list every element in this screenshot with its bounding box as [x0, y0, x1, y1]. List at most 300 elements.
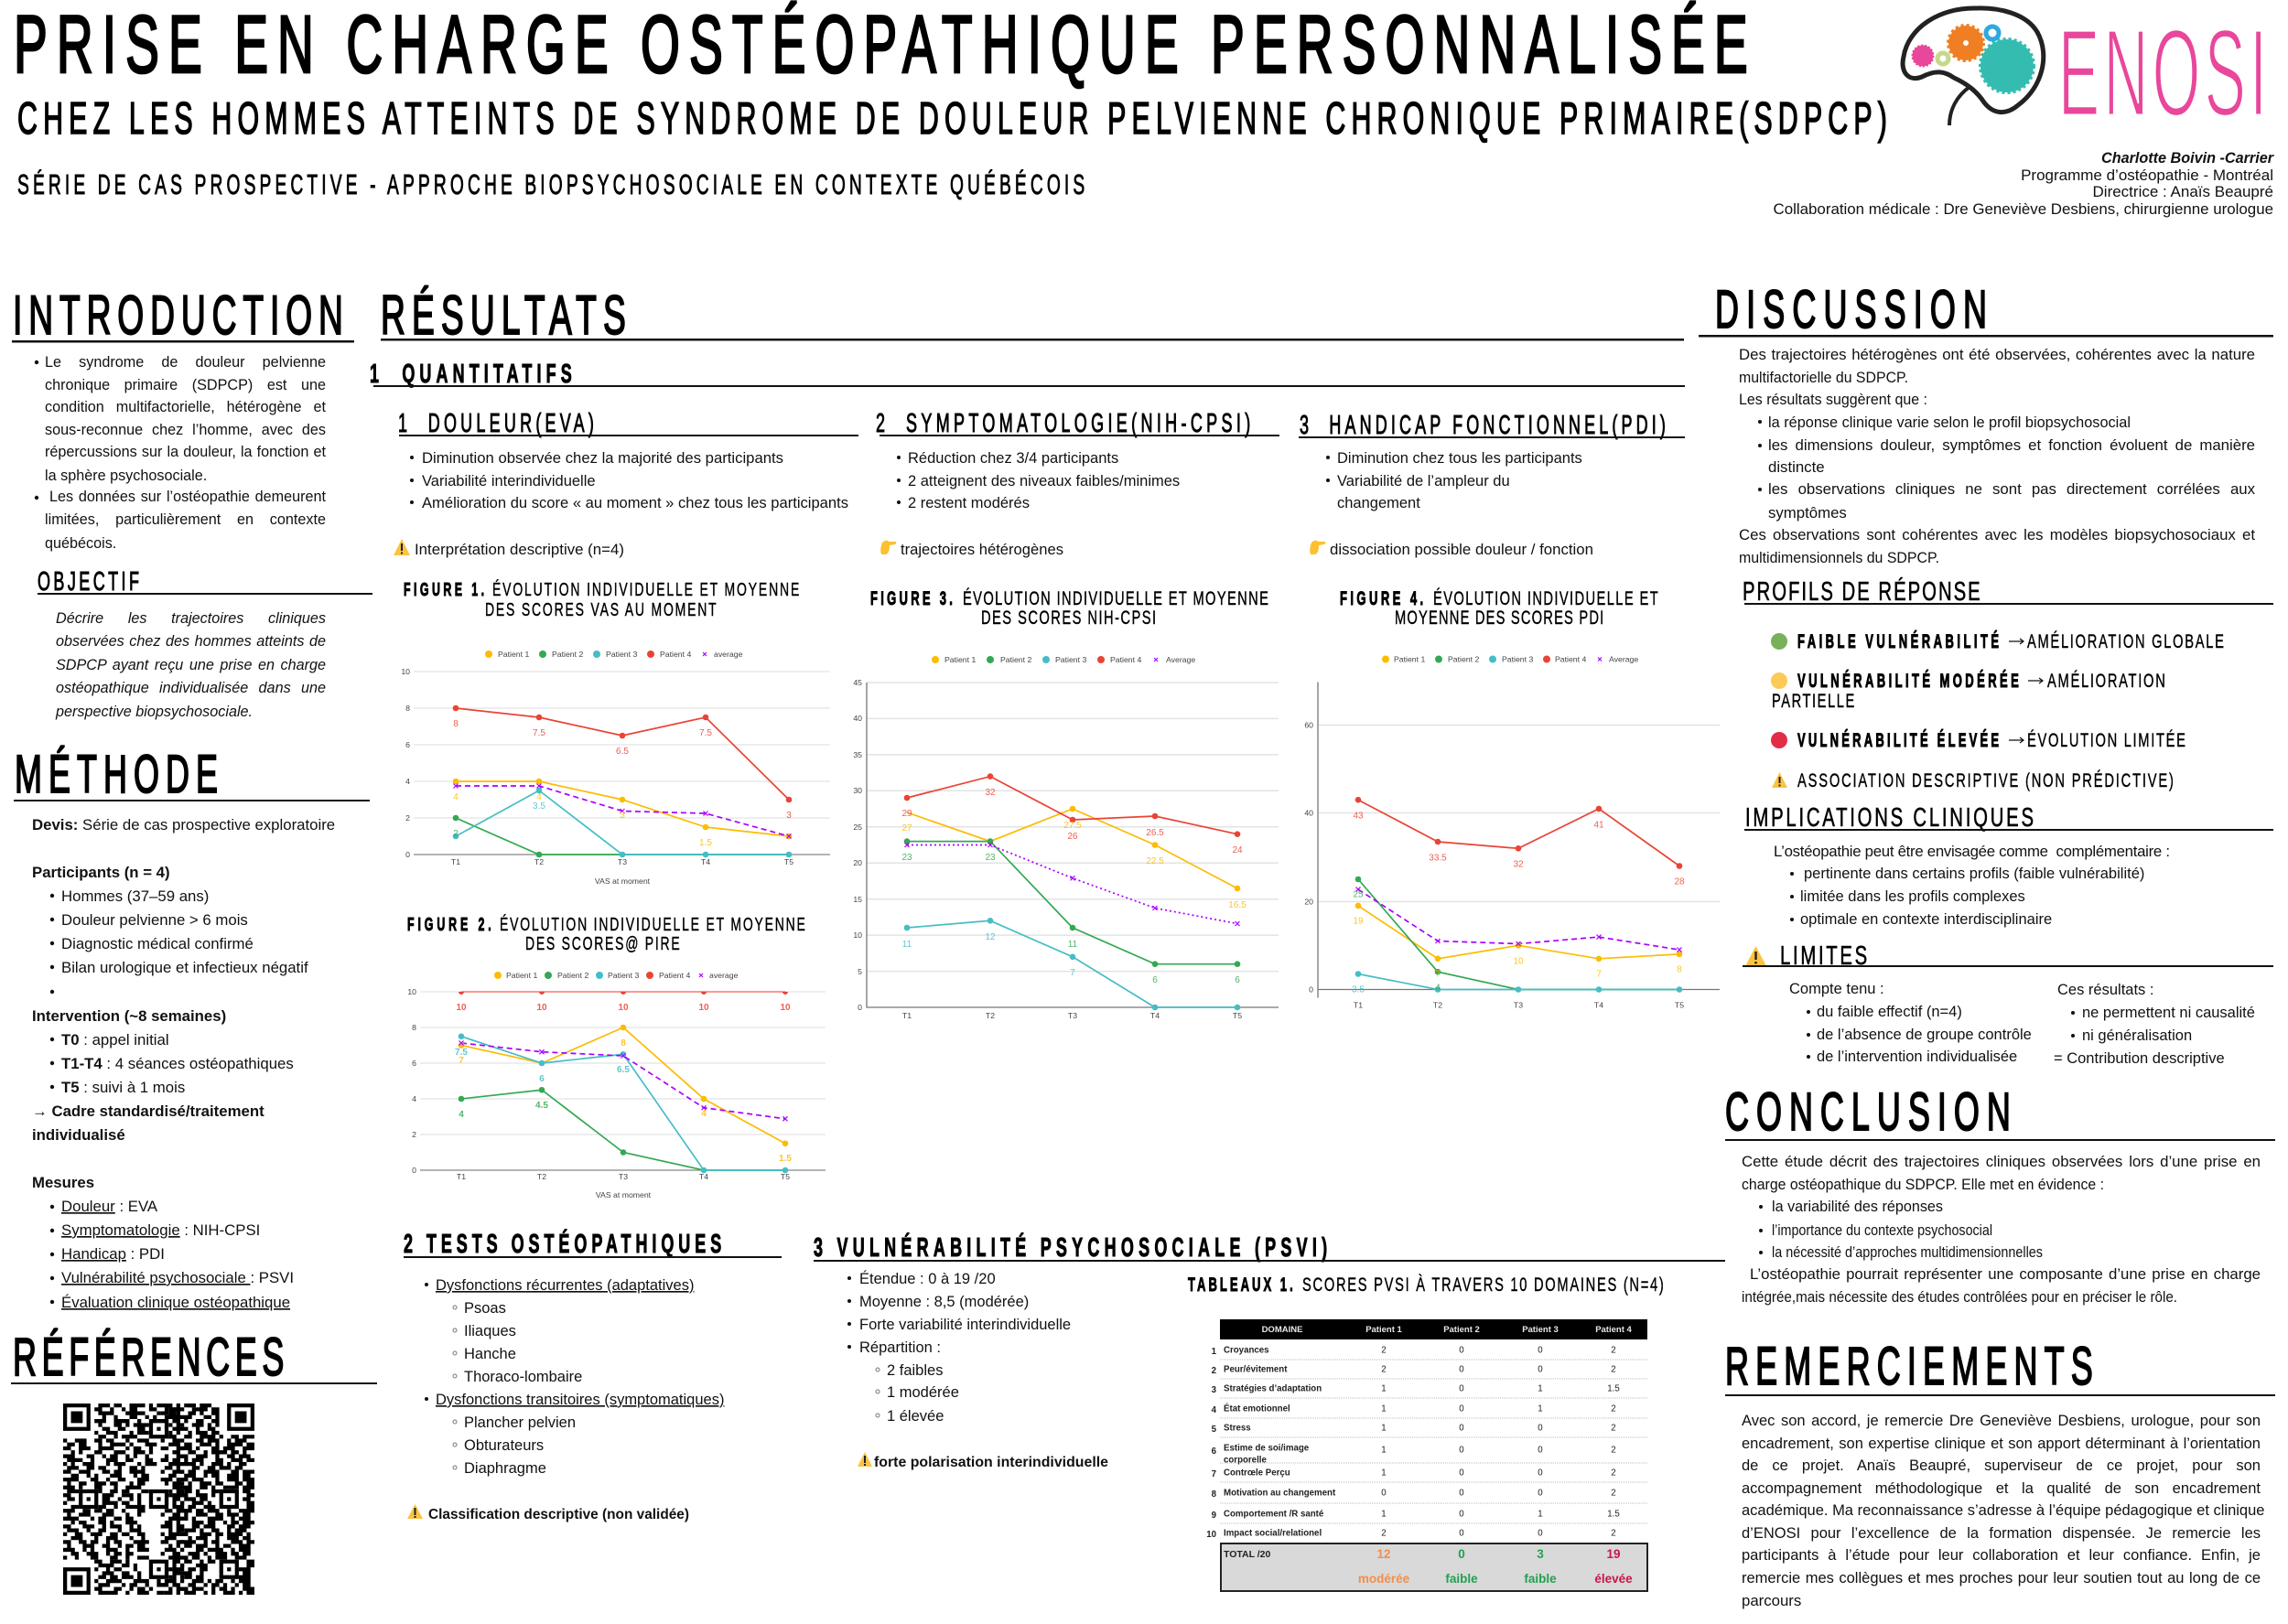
chart: figure 3: 32: [985, 788, 996, 798]
panel: méthode: T5 : suivi à 1 mois: [61, 1079, 185, 1096]
table rows: 0: [1538, 1528, 1543, 1539]
panel: limites: [1743, 941, 2273, 1067]
chart: figure 3: [853, 655, 1279, 1020]
chart: figure 1: T4: [701, 857, 710, 866]
table rows: 4: [1212, 1405, 1217, 1415]
chart: figure 4: 25: [1353, 889, 1364, 900]
panel: méthode: Participants (n = 4): [32, 864, 170, 881]
panel: discussion: Les résultats suggèrent que :: [1739, 391, 1927, 408]
chart: figure 3: T5: [1233, 1011, 1242, 1020]
table rows: 0: [1459, 1404, 1464, 1414]
chart: figure 2: T2: [537, 1172, 546, 1181]
table total row: 19: [1606, 1547, 1621, 1561]
panel: profils de réponse: [1743, 575, 2273, 791]
table: scores PVSI: [1188, 1274, 1664, 1591]
table rows: 0: [1538, 1446, 1543, 1455]
panel: remerciements: remercie mes collègues et mes proches pour leur soutien tout au long de ce: [1742, 1570, 2261, 1586]
chart: figure 2: 10: [698, 1003, 709, 1013]
table rows: 3: [1212, 1385, 1217, 1395]
table header: Patient 2: [1443, 1325, 1480, 1335]
panel: implications cliniques: [1744, 803, 2273, 928]
profile: élevée: ÉVOLUTION LIMITÉE: [2027, 729, 2185, 751]
profile: modérée: [1771, 669, 2165, 712]
chart: figure 1: Patient 1: [498, 650, 529, 659]
chart: figure 4: 3.5: [1352, 984, 1365, 995]
figure 1: [401, 578, 830, 886]
chart: figure 4: 20: [1304, 897, 1313, 906]
figure 3 title: DES SCORES NIH-CPSI: [981, 607, 1156, 629]
panel: discussion: multidimensionnels du SDPCP.: [1739, 549, 1939, 566]
table header: [1220, 1319, 1647, 1339]
table total row: faible: [1524, 1572, 1557, 1586]
panel: vulnérabilité psychosociale: Moyenne : 8,5 (modérée): [859, 1294, 1029, 1310]
heading: références: RÉFÉRENCES: [13, 1328, 284, 1387]
panel: vulnérabilité psychosociale: 1 élevée: [887, 1408, 944, 1425]
profile: modérée: PARTIELLE: [1772, 690, 1854, 712]
table header: Patient 4: [1595, 1325, 1633, 1335]
figure 3: [853, 587, 1279, 1020]
chart: figure 1: average: [714, 650, 743, 659]
chart: figure 4: 10: [1513, 957, 1524, 966]
panel: limites: ne permettent ni causalité: [2082, 1005, 2255, 1021]
table rows: 0: [1459, 1383, 1464, 1394]
chart: figure 3: 20: [853, 858, 862, 867]
figure 1 title: FIGURE 1.: [404, 579, 484, 600]
table rows: 1.5: [1607, 1510, 1620, 1519]
panel: douleur: Diminution observée chez la majorité des participants: [422, 450, 783, 467]
chart: figure 3: 25: [853, 823, 862, 832]
table rows: 2: [1381, 1365, 1387, 1374]
subtitle: CHEZ LES HOMMES ATTEINTS DE SYNDROME DE DOULEUR PELVIENNE CHRONIQUE PRIMAIRE(SDPCP): [17, 93, 1887, 144]
chart: figure 2: 4: [412, 1094, 416, 1103]
chart: figure 1: 0: [405, 850, 410, 859]
chart: figure 3: 11: [902, 940, 912, 950]
chart: figure 4: Patient 3: [1502, 655, 1533, 664]
profile: élevée: VULNÉRABILITÉ ÉLEVÉE: [1797, 728, 1999, 751]
panel: douleur: Amélioration du score « au moment » chez tous les participants: [422, 495, 848, 511]
chart: figure 1: 6.5: [616, 747, 629, 757]
panel: conclusion: la variabilité des réponses: [1772, 1198, 1943, 1215]
table rows: 0: [1459, 1446, 1464, 1455]
table rows: 1: [1381, 1510, 1387, 1519]
heading: symptomatologie: 2 SYMPTOMATOLOGIE(NIH-CPSI): [876, 409, 1250, 438]
panel: introduction: limitées, particulièrement en contexte: [45, 511, 326, 528]
heading: conclusion: CONCLUSION: [1725, 1082, 2011, 1142]
figure 2: [407, 913, 826, 1199]
table rows: 2: [1611, 1365, 1616, 1374]
table rows: 6: [1212, 1447, 1217, 1457]
table rows: 2: [1611, 1404, 1616, 1414]
panel: méthode: [14, 745, 370, 1311]
chart: figure 3: 30: [853, 786, 862, 795]
icon: warning: [407, 1504, 423, 1519]
chart: figure 4: 7: [1435, 970, 1441, 979]
heading: handicap: 3 HANDICAP FONCTIONNEL(PDI): [1300, 411, 1666, 440]
panel: méthode: → Cadre standardisé/traitement: [32, 1102, 264, 1120]
chart: figure 3: 0: [858, 1003, 862, 1012]
chart: figure 4: 4: [1435, 983, 1441, 994]
figure 4 title: ÉVOLUTION INDIVIDUELLE ET: [1433, 587, 1658, 609]
panel: limites: ni généralisation: [2082, 1027, 2192, 1044]
panel: symptomatologie: 2 restent modérés: [908, 495, 1030, 511]
heading: vulnérabilité: 3 VULNÉRABILITÉ PSYCHOSOCIALE (PSVI): [814, 1232, 1327, 1263]
authors: Programme d’ostéopathie - Montréal: [2021, 167, 2273, 184]
panel: handicap fonctionnel: dissociation possible douleur / fonction: [1330, 542, 1593, 558]
table rows: 0: [1459, 1365, 1464, 1374]
chart: figure 3: T4: [1150, 1011, 1160, 1020]
panel: remerciements: Avec son accord, je remercie Dre Geneviève Desbiens, urologue, pour son: [1742, 1413, 2261, 1429]
table rows: 1: [1381, 1424, 1387, 1433]
heading: méthode: MÉTHODE: [15, 745, 218, 804]
table header: Patient 1: [1365, 1325, 1403, 1335]
chart: figure 2: Patient 1: [506, 971, 537, 980]
figure 2 title: ÉVOLUTION INDIVIDUELLE ET MOYENNE: [500, 913, 805, 935]
association note: ASSOCIATION DESCRIPTIVE (NON PRÉDICTIVE): [1797, 769, 2174, 791]
table rows: 2: [1611, 1446, 1616, 1455]
chart: figure 1: 4: [453, 792, 459, 802]
chart: figure 4: 28: [1674, 877, 1685, 887]
table rows: 0: [1459, 1510, 1464, 1519]
heading: introduction: INTRODUCTION: [13, 285, 343, 346]
chart: figure 3: 24: [1232, 845, 1243, 855]
panel: remerciements: [1725, 1337, 2275, 1609]
table rows: Contrœle Perçu: [1224, 1468, 1290, 1479]
chart: figure 1: [401, 650, 830, 886]
table rows: 1.5: [1607, 1383, 1620, 1394]
chart: figure 2: 8: [412, 1023, 416, 1032]
chart: figure 1: 1.5: [699, 838, 712, 848]
chart: figure 4: 60: [1304, 721, 1313, 730]
chart: figure 4: T2: [1433, 1001, 1442, 1010]
chart: figure 3: 26.5: [1146, 828, 1164, 838]
chart: figure 4: 19: [1353, 917, 1364, 926]
table rows: corporelle: [1224, 1455, 1267, 1466]
panel: discussion: Des trajectoires hétérogènes ont été observées, cohérentes avec la nature: [1739, 346, 2255, 363]
chart: figure 4: 40: [1304, 809, 1313, 818]
panel: vulnérabilité psychosociale: Répartition :: [859, 1339, 941, 1356]
chart: figure 2: 10: [618, 1003, 629, 1013]
authors: [1774, 150, 2275, 218]
table rows: 9: [1212, 1511, 1217, 1521]
chart: figure 2: 4.5: [535, 1101, 548, 1111]
chart: figure 2: 7: [459, 1056, 464, 1066]
panel: remerciements: accompagnement méthodologique et la qualité de son encadrement: [1742, 1480, 2261, 1497]
chart: figure 2: T3: [619, 1172, 628, 1181]
chart: figure 1: Patient 2: [552, 650, 583, 659]
panel: méthode: Douleur : EVA: [61, 1198, 158, 1215]
panel: tests ostéopathiques: Dysfonctions récurrentes (adaptatives): [436, 1277, 694, 1294]
chart: figure 3: 7: [1070, 968, 1075, 978]
panel: objectif: ostéopathique individualisée dans une: [56, 680, 326, 696]
chart: figure 1: 6: [405, 740, 410, 749]
chart: figure 1: 3.5: [533, 801, 545, 812]
chart: figure 1: Patient 3: [606, 650, 637, 659]
panel: discussion: distincte: [1768, 458, 1825, 476]
panel: objectif: SDPCP ayant reçu une prise en charge: [56, 657, 326, 673]
panel: conclusion: l’importance du contexte psychosocial: [1772, 1221, 1992, 1239]
figure 4 title: [1340, 587, 1658, 629]
table rows: 0: [1538, 1345, 1543, 1356]
figure 1 title: DES SCORES VAS AU MOMENT: [485, 598, 717, 620]
panel: tests ostéopathiques: Classification descriptive (non validée): [428, 1507, 689, 1522]
panel: vulnérabilité psychosociale: Forte variabilité interindividuelle: [859, 1317, 1071, 1333]
chart: figure 3: 26: [1067, 832, 1078, 842]
panel: méthode: Handicap : PDI: [61, 1245, 165, 1263]
table rows: [1206, 1345, 1620, 1540]
figure 3 title: FIGURE 3.: [870, 587, 953, 609]
table rows: Peur/évitement: [1224, 1365, 1288, 1374]
panel: objectif: [38, 567, 372, 720]
chart: figure 4: T1: [1354, 1001, 1363, 1010]
panel: remerciements: d’ENOSI pour l’excellence de la formation dispensée. Je remercie les: [1742, 1524, 2261, 1541]
panel: remerciements: parcours: [1742, 1592, 1801, 1609]
chart: figure 2: 1.5: [779, 1154, 792, 1164]
authors: Charlotte Boivin -Carrier: [2101, 150, 2275, 167]
table title: SCORES PVSI À TRAVERS 10 DOMAINES (N=4): [1302, 1274, 1664, 1296]
chart: figure 3: 40: [853, 714, 862, 723]
figure 2 title: [407, 913, 805, 954]
chart: figure 2: [407, 971, 826, 1199]
panel: conclusion: charge ostéopathique du SDPCP. Elle met en évidence :: [1742, 1176, 2104, 1193]
panel: tests ostéopathiques: Thoraco-lombaire: [464, 1369, 582, 1385]
heading: discussion: DISCUSSION: [1715, 280, 1987, 339]
heading: tests: 2 TESTS OSTÉOPATHIQUES: [404, 1229, 721, 1259]
heading: résultats: RÉSULTATS: [381, 285, 626, 346]
chart: figure 1: 2: [453, 829, 459, 839]
chart: figure 3: Average: [1166, 655, 1195, 664]
panel: conclusion: la nécessité d’approches multidimensionnelles: [1772, 1243, 2043, 1261]
panel: tests ostéopathiques: Psoas: [464, 1300, 506, 1317]
chart: figure 2: 4: [459, 1110, 464, 1120]
panel: implications cliniques: pertinente dans certains profils (faible vulnérabilité): [1804, 866, 2144, 882]
QR code: [63, 1404, 254, 1595]
table total row: [1221, 1543, 1647, 1591]
heading: douleur: 1 DOULEUR(EVA): [398, 409, 594, 438]
chart: figure 1: 8: [405, 704, 410, 713]
chart: figure 2: average: [709, 971, 739, 980]
table rows: 1: [1381, 1383, 1387, 1394]
chart: figure 3: 45: [853, 678, 862, 687]
panel: implications cliniques: L’ostéopathie peut être envisagée comme complémentaire :: [1774, 843, 2170, 860]
table rows: 0: [1459, 1468, 1464, 1479]
icon: warning: [394, 539, 410, 555]
panel: limites: Compte tenu :: [1789, 981, 1884, 997]
chart: figure 3: T1: [902, 1011, 912, 1020]
chart: figure 1: 3: [620, 811, 625, 821]
table total row: modérée: [1358, 1572, 1410, 1586]
table total row: 12: [1376, 1547, 1391, 1561]
profile: élevée: [1771, 728, 2185, 751]
chart: figure 1: Patient 4: [660, 650, 691, 659]
chart: figure 4: Patient 1: [1394, 655, 1425, 664]
table rows: Croyances: [1224, 1345, 1269, 1356]
panel: vulnérabilité psychosociale: 2 faibles: [887, 1362, 943, 1379]
panel: introduction: sous-reconnue chez l’homme, avec des: [45, 422, 326, 438]
chart: figure 4: Average: [1609, 655, 1638, 664]
table rows: Stress: [1224, 1424, 1251, 1433]
chart: figure 3: 35: [853, 750, 862, 759]
chart: figure 3: 12: [985, 932, 996, 942]
chart: figure 4: 41: [1593, 820, 1604, 831]
panel: conclusion: Cette étude décrit des trajectoires cliniques observées lors d’une prise en: [1742, 1153, 2261, 1170]
table rows: 1: [1538, 1510, 1543, 1519]
panel: limites: = Contribution descriptive: [2054, 1050, 2225, 1067]
table rows: Stratégies d’adaptation: [1224, 1383, 1322, 1394]
panel: méthode: Diagnostic médical confirmé: [61, 935, 254, 952]
panel: introduction: Le syndrome de douleur pelvienne: [45, 354, 326, 371]
figure 2 title: DES SCORES@ PIRE: [525, 932, 680, 954]
chart: figure 4: 33.5: [1429, 853, 1447, 864]
table rows: 10: [1206, 1530, 1216, 1540]
chart: figure 2: 0: [412, 1166, 416, 1175]
panel: symptomatologie: trajectoires hétérogènes: [901, 542, 1063, 558]
chart: figure 4: 0: [1309, 984, 1313, 994]
panel: tests ostéopathiques: Hanche: [464, 1346, 516, 1362]
panel: tests ostéopathiques: [404, 1229, 782, 1522]
table total row: 0: [1458, 1547, 1465, 1561]
chart: figure 3: 29: [901, 809, 912, 819]
logo: ENOSI: [1903, 3, 2267, 142]
panel: discussion: [1699, 280, 2273, 566]
table rows: 2: [1611, 1468, 1616, 1479]
table rows: Motivation au changement: [1224, 1488, 1336, 1499]
chart: figure 3: 22.5: [1146, 856, 1164, 866]
heading: limites: LIMITES: [1780, 941, 1867, 971]
panel: discussion: symptômes: [1768, 504, 1847, 522]
table title: TABLEAUX 1.: [1188, 1274, 1293, 1296]
panel: handicap fonctionnel: changement: [1337, 495, 1420, 511]
table rows: 8: [1212, 1490, 1217, 1500]
figure 4: [1304, 587, 1720, 1010]
chart: figure 2: Patient 4: [659, 971, 690, 980]
chart: figure 3: T3: [1068, 1011, 1077, 1020]
chart: figure 2: 10: [780, 1003, 791, 1013]
table rows: 7: [1212, 1469, 1216, 1479]
chart: figure 2: 10: [536, 1003, 547, 1013]
panel: conclusion: [1725, 1082, 2275, 1306]
panel: limites: de l’intervention individualisée: [1817, 1049, 2017, 1065]
table total row: TOTAL /20: [1224, 1549, 1271, 1560]
panel: douleur: Interprétation descriptive (n=4): [415, 542, 624, 558]
chart: figure 1: 2: [405, 813, 410, 823]
chart: figure 3: Patient 4: [1110, 655, 1141, 664]
chart: figure 4: 8: [1677, 964, 1682, 975]
chart: figure 2: T1: [457, 1172, 466, 1181]
chart: figure 3: 27.5: [1063, 821, 1082, 831]
chart: figure 1: 7.5: [533, 728, 545, 738]
chart: figure 2: T5: [781, 1172, 790, 1181]
figure 1 title: ÉVOLUTION INDIVIDUELLE ET MOYENNE: [492, 578, 799, 600]
table rows: 0: [1459, 1528, 1464, 1539]
chart: figure 2: T4: [699, 1172, 708, 1181]
panel: tests ostéopathiques: Plancher pelvien: [464, 1414, 576, 1431]
panel: discussion: la réponse clinique varie selon le profil biopsychosocial: [1768, 414, 2131, 431]
panel: handicap fonctionnel: Diminution chez tous les participants: [1337, 450, 1582, 467]
chart: figure 2: 4: [701, 1109, 707, 1119]
figure 4 title: FIGURE 4.: [1340, 587, 1423, 609]
heading: implications: IMPLICATIONS CLINIQUES: [1745, 803, 2034, 833]
table rows: 0: [1381, 1488, 1387, 1499]
panel: implications cliniques: optimale en contexte interdisciplinaire: [1800, 911, 2052, 928]
table rows: 1: [1538, 1404, 1543, 1414]
panel: tests ostéopathiques: Diaphragme: [464, 1460, 546, 1477]
chart: figure 3: Patient 1: [944, 655, 976, 664]
figure 2 title: FIGURE 2.: [407, 914, 491, 935]
chart: figure 2: 8: [621, 1038, 626, 1049]
chart: figure 1: 3: [786, 811, 792, 821]
panel: remerciements: participants à l’étude pour leur collaboration et leur confiance. Enfin, je: [1742, 1547, 2261, 1564]
table rows: 2: [1611, 1488, 1616, 1499]
profile: faible: AMÉLIORATION GLOBALE: [2027, 630, 2224, 652]
panel: douleur: Variabilité interindividuelle: [422, 473, 596, 489]
chart: figure 4: [1304, 655, 1720, 1010]
chart: figure 2: Patient 3: [608, 971, 639, 980]
chart: figure 1: 7.5: [699, 728, 712, 738]
panel: vulnérabilité psychosociale: 1 modérée: [887, 1384, 959, 1401]
table rows: 1: [1212, 1347, 1217, 1357]
chart: figure 1: T3: [618, 857, 627, 866]
panel: méthode: Douleur pelvienne > 6 mois: [61, 911, 248, 929]
figure 1 title: [404, 578, 799, 620]
panel: introduction: chronique primaire (SDPCP) est une: [45, 377, 326, 393]
table rows: Comportement /R santé: [1224, 1510, 1324, 1519]
chart: figure 4: T5: [1675, 1001, 1684, 1010]
panel: introduction: Les données sur l’ostéopathie demeurent: [49, 489, 326, 505]
chart: figure 3: Patient 2: [1000, 655, 1031, 664]
profile: modérée: AMÉLIORATION: [2047, 670, 2165, 692]
chart: figure 3: 6: [1152, 975, 1158, 985]
panel: méthode: Mesures: [32, 1174, 94, 1191]
table rows: 0: [1459, 1345, 1464, 1356]
panel: vulnérabilité psychosociale: [814, 1232, 1725, 1470]
panel: objectif: Décrire les trajectoires cliniques: [56, 610, 326, 627]
table rows: 1: [1381, 1468, 1387, 1479]
chart: figure 2: 10: [456, 1003, 467, 1013]
panel: méthode: Vulnérabilité psychosociale : PSVI: [61, 1269, 294, 1286]
chart: figure 1: VAS at moment: [595, 877, 651, 886]
table total row: élevée: [1594, 1572, 1633, 1586]
chart: figure 4: 43: [1353, 811, 1364, 822]
table rows: Impact social/relationel: [1224, 1528, 1322, 1539]
table rows: 2: [1611, 1424, 1616, 1433]
table header: Patient 3: [1522, 1325, 1559, 1335]
panel: limites: de l’absence de groupe contrôle: [1817, 1027, 2032, 1043]
chart: figure 2: VAS at moment: [596, 1190, 652, 1199]
chart: figure 2: 6.5: [617, 1065, 630, 1075]
heading: profils: PROFILS DE RÉPONSE: [1743, 575, 1980, 607]
panel: symptomatologie: [876, 409, 1279, 558]
table rows: 0: [1459, 1488, 1464, 1499]
table rows: 1: [1381, 1404, 1387, 1414]
panel: symptomatologie: Réduction chez 3/4 participants: [908, 450, 1118, 467]
chart: figure 1: 4: [405, 777, 410, 786]
panel: discussion: les dimensions douleur, symptômes et fonction évoluent de manière: [1768, 436, 2255, 454]
chart: figure 1: 10: [401, 667, 410, 676]
table rows: 0: [1538, 1468, 1543, 1479]
chart: figure 2: Patient 2: [557, 971, 588, 980]
panel: limites: Ces résultats :: [2057, 982, 2153, 998]
profile: faible: FAIBLE VULNÉRABILITÉ: [1797, 629, 1999, 652]
chart: figure 3: 6: [1235, 975, 1240, 985]
table rows: 1: [1538, 1383, 1543, 1394]
panel: conclusion: L’ostéopathie pourrait représenter une composante d’une prise en charge: [1750, 1265, 2261, 1283]
panel: méthode: Intervention (~8 semaines): [32, 1007, 226, 1025]
table total row: faible: [1445, 1572, 1478, 1586]
table rows: Estime de soi/image: [1224, 1444, 1310, 1453]
panel: symptomatologie: 2 atteignent des niveaux faibles/minimes: [908, 473, 1180, 489]
panel: discussion: multifactorielle du SDPCP.: [1739, 369, 1908, 386]
chart: figure 4: 32: [1513, 860, 1524, 869]
